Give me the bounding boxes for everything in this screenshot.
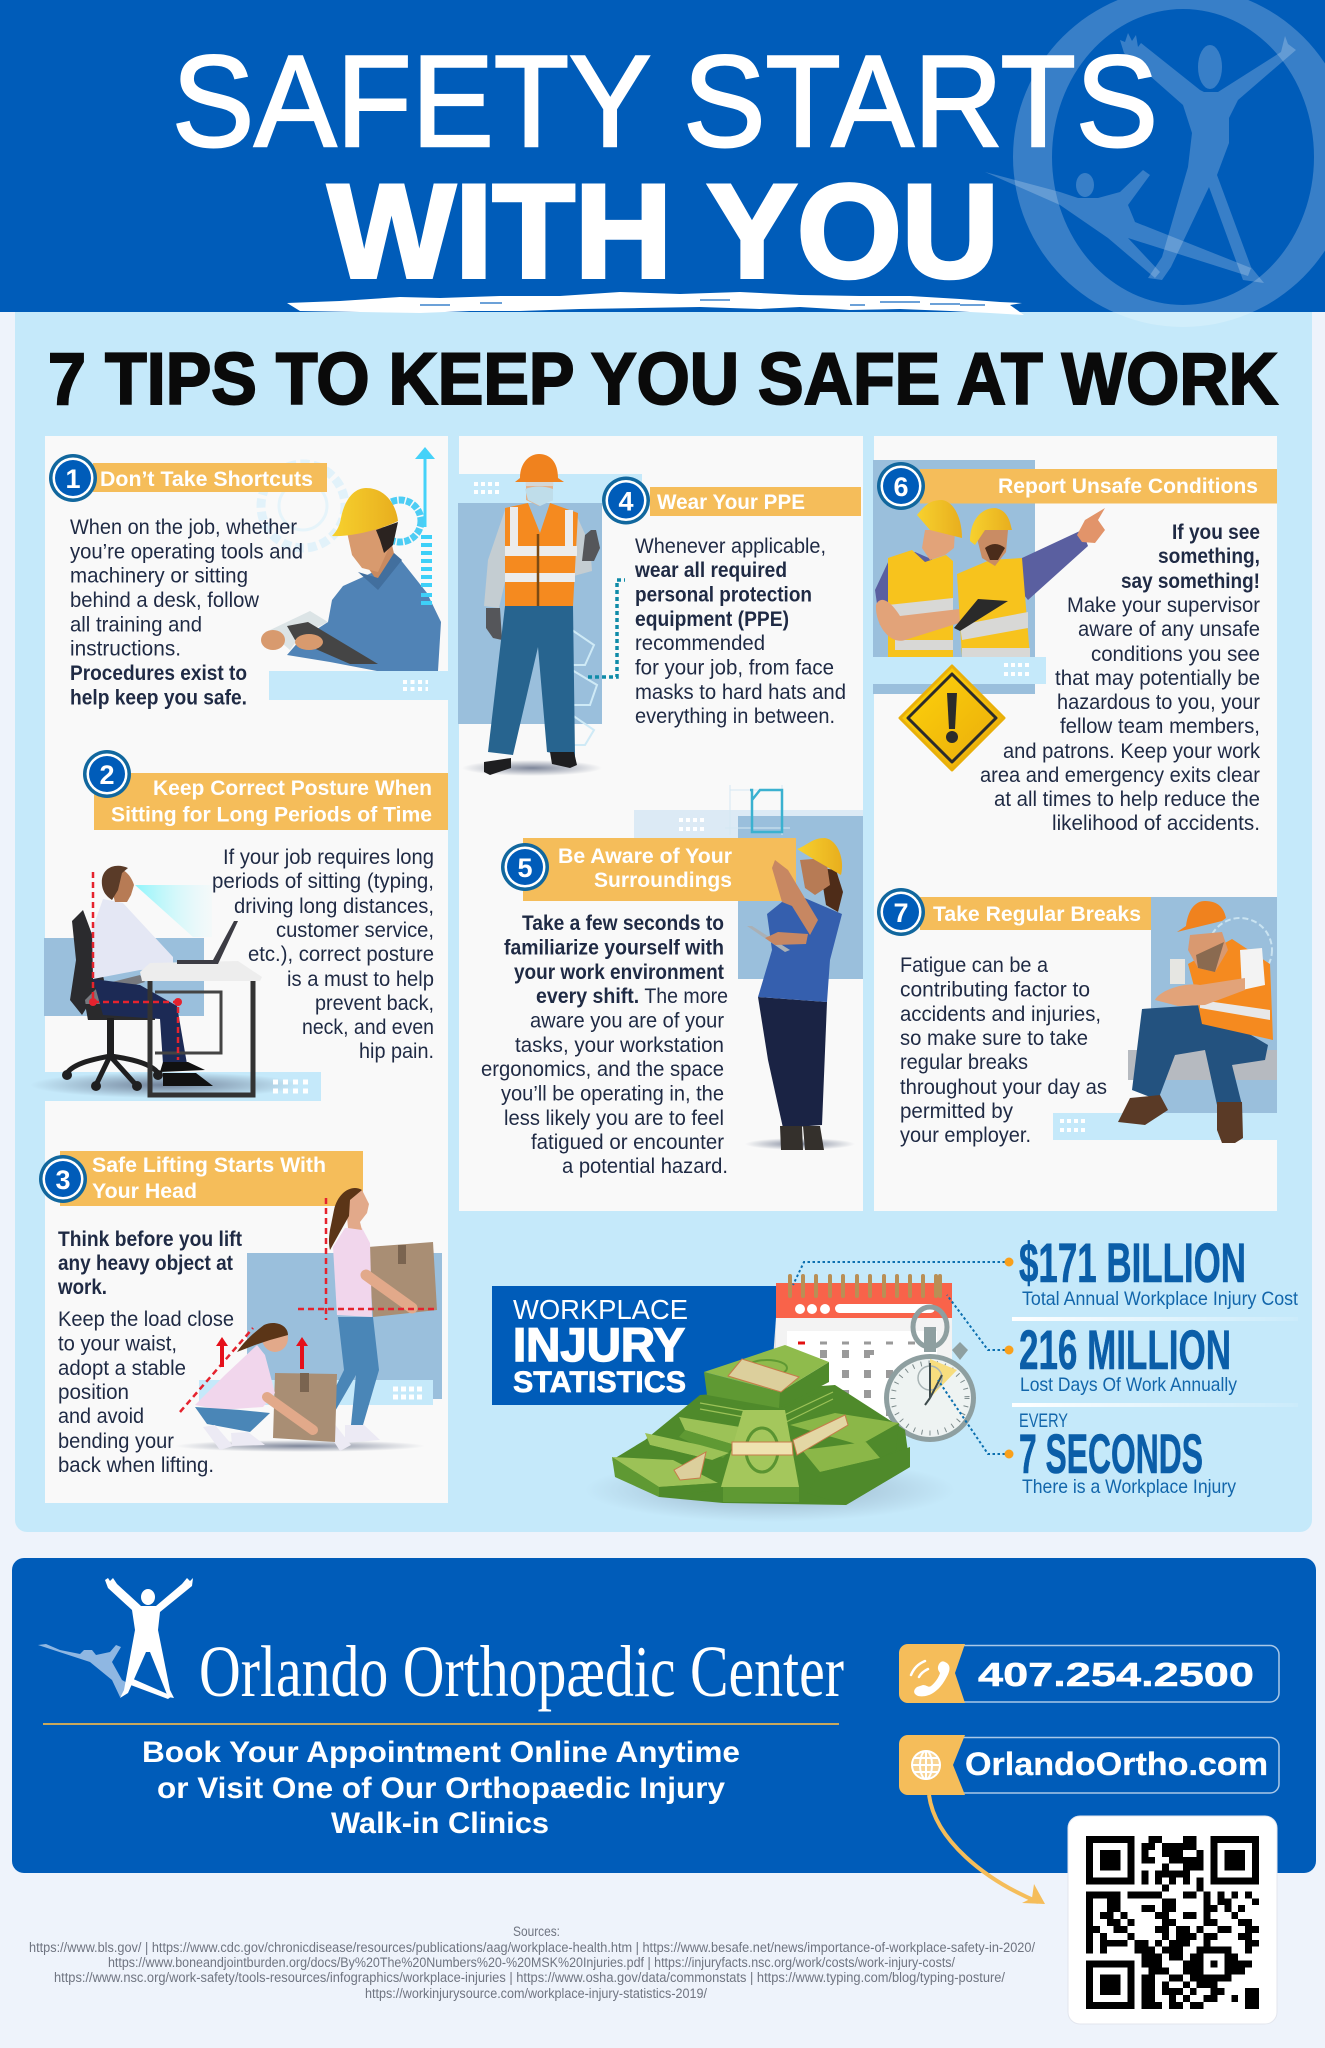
sources: Sources:	[513, 1924, 560, 1939]
tip 7 text	[900, 954, 1107, 1147]
tip 1 text: Procedures exist to	[70, 662, 247, 685]
tip 6 text: at all times to help reduce the	[994, 788, 1260, 811]
brush underline	[287, 292, 1024, 315]
tip 3 heading: 3	[55, 1165, 71, 1195]
tip 7 heading: Take Regular Breaks	[933, 902, 1141, 926]
icon: warning sign	[900, 666, 1004, 770]
main light blue panel	[15, 312, 1312, 1532]
tip 6 text: hazardous to you, your	[1057, 691, 1260, 714]
icon: phone	[911, 1661, 950, 1696]
tip 7 text: your employer.	[900, 1124, 1031, 1147]
tip 2 text: etc.), correct posture	[248, 943, 434, 966]
subtitle: 7 tips: 7 TIPS TO KEEP YOU SAFE AT WORK	[48, 339, 1278, 420]
tip 7 text: regular breaks	[900, 1051, 1028, 1074]
illustration: stopwatch	[884, 1307, 976, 1442]
tip 1 text: instructions.	[70, 638, 181, 661]
tip 3 text: position	[58, 1381, 129, 1404]
tip 6 text: Make your supervisor	[1067, 594, 1260, 617]
tip 2 heading: 2	[99, 760, 115, 790]
label box: WORKPLACE	[513, 1294, 688, 1325]
tip 1 illustration: worker with tablet	[261, 447, 448, 700]
phone pill	[899, 1644, 1279, 1703]
tip 5 text: your work environment	[514, 961, 724, 984]
sources: https://www.boneandjointburden.org/docs/By%20The%20Numbers%20-%20MSK%20Injuries.pdf | https://injuryfacts.nsc.org/work/costs/work-injury-costs/	[108, 1955, 955, 1970]
website pill: OrlandoOrtho.com	[965, 1746, 1268, 1782]
connectors: dotted leader lines	[793, 1258, 1012, 1458]
tip 5 text: less likely you are to feel	[504, 1107, 724, 1130]
tip 6 text: aware of any unsafe	[1078, 618, 1260, 641]
tip 3 text: and avoid	[58, 1405, 144, 1428]
tip 1 heading: 1	[65, 464, 81, 494]
tip 6 text: fellow team members,	[1060, 715, 1260, 738]
arrow to QR code	[929, 1795, 1045, 1904]
tip 7 text: so make sure to take	[900, 1027, 1088, 1050]
tip 5 backdrop and blueprint	[634, 785, 863, 979]
tip 3 heading	[39, 1151, 363, 1206]
tip 4 text: recommended	[635, 632, 765, 655]
tip 3 text	[57, 1228, 242, 1477]
header band	[0, 0, 1325, 327]
tip 5 illustration: woman surveying surroundings	[745, 838, 855, 1150]
phone pill: 407.254.2500	[978, 1657, 1254, 1694]
tip 2 text: neck, and even	[302, 1016, 434, 1039]
tip 4 heading: Wear Your PPE	[657, 490, 805, 514]
tip 6 text: and patrons. Keep your work	[1003, 740, 1260, 763]
tip 2 heading	[83, 750, 448, 830]
stat: every 7 seconds	[1019, 1410, 1236, 1498]
tip 4 text: personal protection	[635, 584, 812, 606]
tip 5 text: tasks, your workstation	[515, 1034, 724, 1057]
tip 6 text: likelihood of accidents.	[1052, 812, 1260, 835]
tip 2 text: If your job requires long	[223, 846, 434, 869]
tip 6 text: conditions you see	[1091, 643, 1260, 666]
call to action	[142, 1736, 740, 1840]
tip 5 heading: 5	[517, 853, 533, 883]
tip 3 heading: Your Head	[92, 1179, 197, 1203]
tip 7 heading: 7	[893, 898, 909, 928]
tip 3 text: adopt a stable	[58, 1357, 186, 1380]
sources: https://www.bls.gov/ | https://www.cdc.gov/chronicdisease/resources/publications/aag/workplace-health.htm | https://www.besafe.net/news/importance-of-workplace-safety-in-2020/	[29, 1940, 1035, 1955]
tip 3 text: bending your	[58, 1430, 174, 1453]
tip 2 text: periods of sitting (typing,	[212, 870, 434, 893]
tip 5 text: fatigued or encounter	[531, 1131, 724, 1154]
tip 5 text: Take a few seconds to	[522, 912, 724, 935]
tip 1 text: you’re operating tools and	[70, 540, 303, 564]
tip 5 text: ergonomics, and the space	[481, 1058, 724, 1081]
panel: tips 1 to 3	[30, 436, 448, 1503]
tip 1 text	[70, 516, 303, 709]
tip 6 text: area and emergency exits clear	[980, 764, 1260, 787]
tip 3 text: work.	[57, 1276, 107, 1299]
tip 6 backdrop	[873, 460, 1035, 694]
tip 2 illustration: seated posture at desk	[30, 866, 321, 1101]
tip 7 heading	[877, 888, 1151, 936]
tip 4 text: equipment (PPE)	[635, 608, 789, 631]
QR code card	[1068, 1816, 1277, 2024]
tip 5 text: a potential hazard.	[562, 1155, 728, 1178]
tip 5 text: aware you are of your	[530, 1010, 724, 1032]
title: safety starts with you	[172, 28, 1158, 306]
title: safety starts with you: WITH YOU	[328, 158, 999, 306]
stat: lost days: Lost Days Of Work Annually	[1020, 1374, 1237, 1396]
tip 7 text: contributing factor to	[900, 978, 1090, 1002]
section: workplace injury statistics	[492, 1231, 1299, 1522]
tip 3 heading: Safe Lifting Starts With	[92, 1153, 326, 1177]
tip 6 heading: 6	[893, 472, 909, 502]
tip 6 text: say something!	[1121, 570, 1260, 593]
tip 4 illustration: worker in PPE	[458, 454, 642, 776]
tip 1 text: help keep you safe.	[70, 686, 247, 709]
stat: every 7 seconds: There is a Workplace Injury	[1022, 1476, 1236, 1498]
sources	[29, 1924, 1035, 2001]
call to action: or Visit One of Our Orthopaedic Injury	[157, 1772, 725, 1805]
tip 7 illustration: worker on break	[1053, 897, 1277, 1143]
tip 5 text: every shift. The more	[536, 985, 728, 1008]
tip 6 text: that may potentially be	[1055, 667, 1260, 690]
tip 2 text: prevent back,	[315, 992, 434, 1015]
stat: annual cost: Total Annual Workplace Injury Cost	[1022, 1288, 1299, 1310]
tip 6 text: something,	[1158, 545, 1260, 568]
tip 1 text: machinery or sitting	[70, 565, 248, 588]
tip 4 text: Whenever applicable,	[635, 535, 826, 558]
tip 3 text: Keep the load close	[58, 1308, 234, 1331]
website pill	[899, 1735, 1279, 1795]
tip 1 text: When on the job, whether	[70, 516, 297, 539]
illustration: calendar	[770, 1276, 952, 1426]
tip 2 text: is a must to help	[287, 968, 434, 991]
tip 3 text: back when lifting.	[58, 1454, 214, 1477]
tip 5 heading: Be Aware of Your	[558, 844, 733, 868]
tip 4 heading	[602, 476, 861, 524]
logo: orlando orthopaedic center: Orlando Orthopædic Center	[199, 1631, 844, 1712]
tip 2 heading: Sitting for Long Periods of Time	[111, 802, 432, 826]
panel: tips 4 and 5	[458, 436, 863, 1211]
tip 3 text: any heavy object at	[58, 1252, 233, 1275]
tip 6 text: If you see	[1172, 521, 1260, 544]
call to action: Walk-in Clinics	[331, 1807, 549, 1840]
tip 7 text: Fatigue can be a	[900, 954, 1048, 977]
tip 1 heading: Don’t Take Shortcuts	[100, 467, 313, 491]
tip 2 text: driving long distances,	[234, 895, 434, 918]
connector: PPE dotted line	[588, 580, 625, 677]
tip 1 text: behind a desk, follow	[70, 589, 260, 612]
tip 5 heading	[501, 838, 796, 901]
illustration: money pile	[585, 1345, 955, 1522]
label box: STATISTICS	[513, 1366, 686, 1399]
sources: https://www.nsc.org/work-safety/tools-resources/infographics/workplace-injuries | https://www.osha.gov/data/commonstats | https://www.typing.com/blog/typing-posture/	[54, 1970, 1005, 1985]
logo: orlando orthopaedic center	[38, 1578, 844, 1712]
tip 7 text: permitted by	[900, 1100, 1013, 1123]
label box	[492, 1286, 776, 1405]
icon: globe	[912, 1751, 940, 1779]
label box: INJURY	[513, 1318, 685, 1371]
tip 3 text: Think before you lift	[58, 1228, 242, 1251]
tip 5 text: you’ll be operating in, the	[501, 1082, 724, 1106]
tip 5 text	[481, 912, 728, 1178]
tip 2 heading: Keep Correct Posture When	[153, 776, 432, 800]
tip 2 text: customer service,	[276, 919, 434, 942]
sources: https://workinjurysource.com/workplace-injury-statistics-2019/	[365, 1986, 707, 2001]
tip 5 heading: Surroundings	[594, 868, 732, 892]
footer panel	[12, 1558, 1316, 1873]
tip 6 heading: Report Unsafe Conditions	[998, 474, 1258, 498]
tip 3 illustration: safe lifting	[175, 1188, 442, 1452]
tip 4 text: everything in between.	[635, 705, 835, 728]
call to action: Book Your Appointment Online Anytime	[142, 1736, 740, 1769]
tip 2 text: hip pain.	[359, 1040, 434, 1063]
tip 4 text	[634, 535, 846, 728]
tip 4 text: masks to hard hats and	[635, 681, 846, 704]
tip 4 text: wear all required	[634, 559, 787, 582]
title: safety starts with you: SAFETY STARTS	[172, 28, 1158, 174]
tip 6 illustration: two workers reporting	[873, 500, 1105, 684]
tip 3 text: to your waist,	[58, 1332, 177, 1356]
tip 5 text: familiarize yourself with	[504, 936, 724, 960]
tip 6 heading	[877, 462, 1277, 510]
watermark logo	[985, 0, 1325, 327]
tip 1 text: all training and	[70, 613, 202, 636]
stat: lost days	[1019, 1318, 1237, 1396]
tip 4 heading: 4	[618, 486, 634, 516]
tip 7 text: throughout your day as	[900, 1076, 1107, 1099]
panel: tips 6 and 7	[873, 436, 1277, 1211]
tip 4 text: for your job, from face	[635, 656, 834, 680]
stat: every 7 seconds: EVERY	[1019, 1410, 1068, 1432]
tip 1 heading	[49, 454, 327, 502]
tip 6 text	[980, 521, 1260, 835]
tip 7 text: accidents and injuries,	[900, 1003, 1101, 1026]
tip 2 text	[212, 846, 434, 1063]
